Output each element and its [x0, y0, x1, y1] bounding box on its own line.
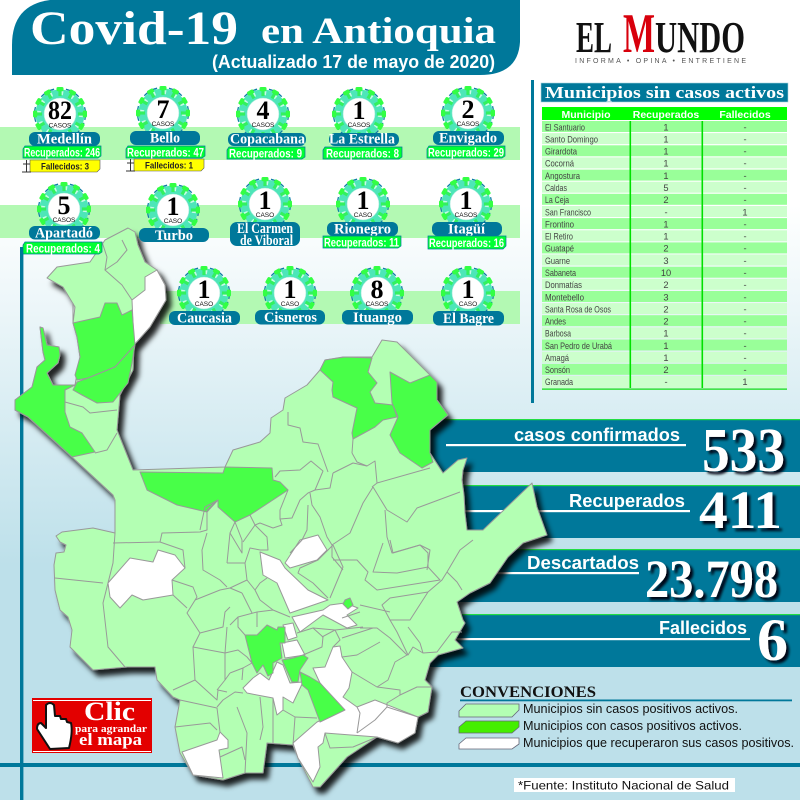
- table rows: 2: [663, 316, 669, 326]
- badge: Cisneros: Cisneros: [264, 310, 317, 326]
- badge: Ituango: 8: [370, 275, 384, 304]
- badge: Rionegro: [323, 177, 401, 250]
- table rows: Sonsón: [545, 365, 570, 375]
- badge: El Carmen de Viboral: CASO: [256, 212, 274, 219]
- badge: Caucasia: CASO: [195, 301, 213, 308]
- table rows: 2: [663, 304, 669, 314]
- table rows: 3: [663, 292, 669, 302]
- badge: Medellín: [22, 87, 101, 172]
- badge: Apartadó: 5: [58, 191, 70, 220]
- table rows: -: [743, 244, 747, 254]
- table rows: [545, 122, 748, 387]
- table rows: -: [743, 183, 747, 193]
- table rows: -: [743, 268, 747, 278]
- table header row: Municipio: [562, 109, 610, 121]
- table rows: -: [743, 292, 747, 302]
- logo: El Mundo: INFORMA • OPINA • ENTRETIENE: [575, 58, 746, 65]
- badge: Copacabana: [227, 87, 306, 160]
- title location: en Antioquia: [261, 11, 496, 52]
- table rows: -: [743, 341, 747, 351]
- badge: Copacabana: 4: [256, 96, 270, 125]
- table rows: 1: [663, 219, 669, 229]
- badge: Itagüí: CASOS: [455, 212, 478, 219]
- table rows: -: [743, 195, 747, 205]
- stat: fallecidos: Fallecidos: [659, 618, 747, 638]
- badge: Bello: Fallecidos: 1: [145, 160, 194, 172]
- logo: El Mundo: EL: [576, 13, 612, 62]
- badge: Turbo: Turbo: [155, 228, 193, 244]
- table rows: 1: [663, 147, 669, 157]
- map of Antioquia: [15, 228, 547, 787]
- table rows: Donmatías: [545, 280, 582, 290]
- badge: Bello: [126, 86, 205, 172]
- stat: descartados: Descartados: [527, 553, 639, 573]
- table rows: Amagá: [545, 353, 570, 363]
- stat: fallecidos: [659, 607, 788, 673]
- badge: Apartadó: CASOS: [53, 217, 76, 224]
- button: click to enlarge map: Clic: [84, 697, 135, 726]
- table rows: Cocorná: [545, 159, 575, 169]
- legend item: without active cases: Municipios sin casos positivos activos.: [523, 702, 738, 716]
- table rows: 1: [742, 207, 748, 217]
- table rows: -: [743, 353, 747, 363]
- badge: Turbo: CASO: [164, 218, 182, 225]
- table rows: Guatapé: [545, 244, 574, 254]
- table rows: San Francisco: [545, 207, 591, 217]
- table rows: -: [743, 232, 747, 242]
- logo: El Mundo: M: [623, 3, 655, 65]
- badge: Envigado: Envigado: [439, 130, 497, 146]
- table rows: 3: [663, 256, 669, 266]
- icon: pointing hand: [37, 703, 72, 749]
- badge: Itagüí: 1: [460, 186, 472, 215]
- badge: Turbo: 1: [166, 192, 180, 221]
- table rows: 5: [663, 183, 669, 193]
- municipalities with active cases: [15, 303, 448, 722]
- table rows: 1: [663, 159, 669, 169]
- table rows: -: [743, 122, 747, 132]
- table rows: El Santuario: [545, 122, 585, 132]
- table header row: Recuperados: [633, 109, 699, 121]
- button: click to enlarge map: para agrandar: [75, 723, 147, 735]
- badge: Itagüí: [428, 177, 506, 250]
- table rows: 10: [661, 268, 671, 278]
- map base outline: [15, 228, 547, 787]
- badge: El Bagre: [433, 266, 504, 327]
- badge: Caucasia: [169, 266, 240, 326]
- table rows: Barbosa: [545, 329, 572, 339]
- table rows: 1: [663, 341, 669, 351]
- table heading: Municipios sin casos activos: [545, 83, 784, 102]
- title: Covid-19: [30, 2, 238, 55]
- badge: Envigado: 2: [462, 95, 474, 124]
- table rows: Frontino: [545, 219, 574, 229]
- badge: Cisneros: 1: [284, 275, 296, 304]
- table rows: San Pedro de Urabá: [545, 341, 613, 351]
- table rows: El Retiro: [545, 232, 573, 242]
- source note: *Fuente: Instituto Nacional de Salud: [518, 778, 729, 792]
- table rows: Granada: [545, 377, 574, 387]
- badge: Caucasia: Caucasia: [177, 310, 233, 326]
- table header row: [542, 107, 787, 121]
- badge: El Carmen de Viboral: El Carmen: [237, 221, 293, 237]
- badge: Medellín: Medellín: [37, 132, 92, 148]
- table rows: Santa Rosa de Osos: [545, 304, 611, 314]
- badge: El Carmen de Viboral: [230, 177, 300, 249]
- badge: Rionegro: Recuperados: 11: [324, 238, 399, 250]
- badge: Itagüí: Itagüí: [448, 222, 486, 238]
- badge: Copacabana: Recuperados: 9: [229, 148, 302, 160]
- table rows: 1: [742, 377, 748, 387]
- table rows: Angostura: [545, 171, 581, 181]
- badge: La Estrella: Recuperados: 8: [326, 148, 400, 160]
- table header row: Fallecidos: [719, 109, 771, 121]
- stat: casos confirmados: [514, 417, 785, 485]
- badge: Bello: Bello: [150, 130, 180, 146]
- badge: Copacabana: CASOS: [252, 122, 275, 129]
- update date: (Actualizado 17 de mayo de 2020): [212, 52, 495, 72]
- badge: Cisneros: [255, 266, 325, 326]
- badge: Medellín: Recuperados: 246: [24, 148, 100, 160]
- logo: El Mundo: UNDO: [655, 13, 745, 62]
- badge: Copacabana: Copacabana: [230, 132, 306, 148]
- table rows: 1: [663, 134, 669, 144]
- table rows: 1: [663, 171, 669, 181]
- badge: La Estrella: [323, 87, 402, 160]
- badge: Itagüí: Recuperados: 16: [429, 238, 504, 250]
- badge: Medellín: Fallecidos: 3: [41, 162, 89, 172]
- table rows: 2: [663, 280, 669, 290]
- badge: La Estrella: CASOS: [348, 122, 371, 129]
- legend item: recovered: Municipios que recuperaron sus casos positivos.: [523, 736, 794, 750]
- table rows: -: [664, 207, 668, 217]
- badge: El Carmen de Viboral: de Viboral: [240, 233, 293, 249]
- municipal boundaries: [55, 240, 473, 773]
- badge: Turbo: [139, 183, 209, 244]
- table rows: Santo Domingo: [545, 134, 598, 144]
- table rows: 1: [663, 353, 669, 363]
- badge: Medellín: 82: [48, 96, 72, 125]
- legend item: with active cases: Municipios con casos positivos activos.: [523, 719, 742, 733]
- table rows: -: [743, 171, 747, 181]
- panel: table of municipalities without active cases: [541, 83, 788, 390]
- legend: convenciones: CONVENCIONES: [460, 684, 596, 701]
- table rows: 1: [663, 122, 669, 132]
- table row backgrounds: [542, 121, 787, 390]
- badge: Apartadó: [23, 182, 102, 256]
- table rows: Sabaneta: [545, 268, 577, 278]
- stat: casos confirmados: casos confirmados: [514, 425, 680, 445]
- badge: Envigado: Recuperados: 29: [428, 148, 504, 160]
- table rows: 2: [663, 365, 669, 375]
- legend: convenciones: [459, 684, 794, 750]
- table rows: Guarne: [545, 256, 570, 266]
- table rows: Andes: [545, 316, 566, 326]
- table rows: La Ceja: [545, 195, 570, 205]
- stat: fallecidos: 6: [757, 607, 788, 673]
- badge: Cisneros: CASO: [281, 301, 299, 308]
- municipalities that recovered: [108, 270, 418, 782]
- badge: Ituango: Ituango: [353, 310, 402, 326]
- table rows: -: [743, 304, 747, 314]
- badge: Bello: CASOS: [152, 121, 175, 128]
- table rows: 2: [663, 244, 669, 254]
- badge: Ituango: CASOS: [366, 301, 389, 308]
- badge: Caucasia: 1: [198, 275, 210, 304]
- badge: Envigado: [427, 86, 505, 160]
- badge: El Carmen de Viboral: 1: [258, 186, 272, 215]
- stat: recuperados: [569, 480, 782, 540]
- table rows: -: [664, 377, 668, 387]
- stat: descartados: 23.798: [645, 549, 778, 609]
- stat: casos confirmados: 533: [702, 417, 785, 485]
- stat bars background: [430, 419, 800, 667]
- table rows: -: [743, 329, 747, 339]
- table rows: 1: [663, 232, 669, 242]
- table rows: -: [743, 147, 747, 157]
- badge: El Bagre: El Bagre: [443, 311, 495, 327]
- table rows: -: [743, 134, 747, 144]
- badge: Ituango: [342, 266, 413, 326]
- table rows: 2: [663, 195, 669, 205]
- badge: La Estrella: 1: [352, 96, 366, 125]
- table rows: -: [743, 219, 747, 229]
- badge: El Bagre: CASO: [459, 301, 477, 308]
- badge: Rionegro: Rionegro: [334, 222, 391, 238]
- badge: El Bagre: 1: [462, 275, 474, 304]
- table rows: 1: [663, 329, 669, 339]
- green stripes behind municipality badges: [0, 127, 520, 324]
- table rows: -: [743, 256, 747, 266]
- table rows: Caldas: [545, 183, 567, 193]
- badge: Bello: 7: [156, 95, 170, 124]
- badge: La Estrella: La Estrella: [329, 132, 396, 148]
- stat: descartados: [527, 549, 778, 609]
- stat: recuperados: Recuperados: [569, 491, 685, 511]
- table rows: Girardota: [545, 147, 578, 157]
- table rows: -: [743, 159, 747, 169]
- badge: Rionegro: CASO: [354, 212, 372, 219]
- badge: Bello: Recuperados: 47: [127, 148, 204, 160]
- button: click to enlarge map: [32, 697, 152, 753]
- badge: Medellín: CASOS: [49, 122, 72, 130]
- table rows: Montebello: [545, 292, 584, 302]
- table rows: -: [743, 365, 747, 375]
- header banner: [12, 0, 520, 75]
- button: click to enlarge map: el mapa: [79, 730, 143, 749]
- logo: El Mundo: [575, 3, 746, 65]
- table rows: -: [743, 316, 747, 326]
- badge: Rionegro: 1: [356, 186, 370, 215]
- badge: Envigado: CASOS: [457, 121, 480, 128]
- table rows: -: [743, 280, 747, 290]
- badge: Apartadó: Recuperados: 4: [26, 244, 101, 256]
- badge: Apartadó: Apartadó: [35, 226, 93, 242]
- stat: recuperados: 411: [699, 480, 782, 540]
